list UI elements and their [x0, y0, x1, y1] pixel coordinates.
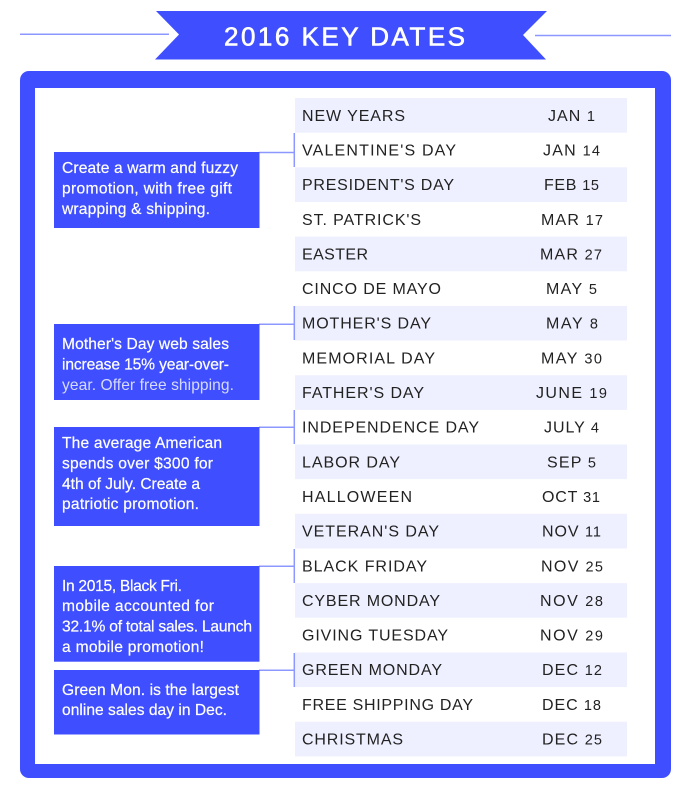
row: Christmas: CHRISTMAS	[302, 732, 403, 748]
callout: Green Monday: Green Mon. is the largest	[62, 682, 240, 699]
row: Valentine's Day: JAN 14	[543, 142, 600, 160]
row: Green Monday	[295, 652, 627, 687]
callout: Black Friday: In 2015, Black Fri.	[62, 578, 182, 595]
callout: Black Friday: 32.1% of total sales. Launch	[62, 618, 252, 635]
row: Labor Day: SEP 5	[547, 454, 596, 471]
row: Father's Day: FATHER'S DAY	[302, 385, 424, 402]
row: Free Shipping Day	[302, 697, 601, 714]
row: Cyber Monday: CYBER MONDAY	[302, 593, 440, 610]
row: St. Patrick's: ST. PATRICK'S	[302, 212, 421, 229]
row: Independence Day: INDEPENDENCE DAY	[302, 420, 479, 437]
row: Labor Day	[295, 444, 627, 479]
row: Cyber Monday	[295, 583, 627, 618]
callout: Mother's Day	[54, 306, 294, 400]
callout: Independence Day: The average American	[62, 435, 222, 452]
row: Easter: EASTER	[302, 246, 368, 263]
row: Black Friday	[302, 558, 603, 575]
row: Father's Day: JUNE 19	[536, 385, 607, 402]
row: New Years: JAN 1	[548, 108, 595, 125]
row: New Years: NEW YEARS	[302, 108, 405, 125]
row: Father's Day	[295, 375, 627, 410]
callout: Black Friday: mobile accounted for	[62, 598, 214, 615]
row: Green Monday: DEC 12	[542, 662, 602, 679]
row: Giving Tuesday: NOV 29	[540, 628, 603, 645]
row: Free Shipping Day: FREE SHIPPING DAY	[302, 697, 473, 714]
row: Black Friday: BLACK FRIDAY	[302, 558, 427, 575]
row: President's Day	[295, 167, 627, 202]
date table	[295, 98, 627, 756]
row: New Years	[295, 98, 627, 133]
callout: Independence Day	[54, 410, 294, 526]
row: Free Shipping Day: DEC 18	[542, 697, 601, 714]
callout: Independence Day: 4th of July. Create a	[62, 476, 200, 493]
header banner	[20, 11, 671, 60]
row: Mother's Day	[295, 306, 627, 341]
row: Valentine's Day: VALENTINE'S DAY	[302, 142, 456, 160]
callout: Independence Day: spends over $300 for	[62, 455, 213, 472]
row: Valentine's Day	[302, 142, 600, 160]
callout: Valentine's Day: Create a warm and fuzzy	[62, 160, 238, 177]
row: Labor Day: LABOR DAY	[302, 454, 400, 471]
row: Memorial Day: MAY 30	[541, 350, 602, 367]
row: Mother's Day: MOTHER'S DAY	[302, 316, 431, 333]
row: Memorial Day: MEMORIAL DAY	[302, 350, 435, 367]
callout: Valentine's Day	[54, 133, 294, 228]
row: Black Friday: NOV 25	[541, 558, 603, 575]
row: Memorial Day	[302, 350, 602, 367]
row: Cyber Monday: NOV 28	[540, 593, 603, 610]
row: Easter	[295, 237, 627, 271]
callout: Mother's Day: increase 15% year-over-	[62, 356, 229, 374]
row: President's Day: PRESIDENT'S DAY	[302, 177, 454, 194]
row: Christmas: DEC 25	[542, 732, 602, 748]
row: Cinco de Mayo	[302, 281, 597, 298]
row: St. Patrick's: MAR 17	[541, 212, 603, 229]
row: Veteran's Day: VETERAN'S DAY	[302, 524, 439, 541]
callout: Mother's Day: year. Offer free shipping.	[62, 377, 234, 394]
row: Cinco de Mayo: CINCO DE MAYO	[302, 281, 441, 298]
header banner: 2016 KEY DATES	[224, 22, 465, 52]
row: Green Monday: GREEN MONDAY	[302, 662, 442, 679]
callout: Independence Day: patriotic promotion.	[62, 496, 199, 513]
callout: Green Monday: online sales day in Dec.	[62, 702, 227, 719]
callout: Black Friday	[54, 549, 294, 662]
callout: Valentine's Day: promotion, with free gift	[62, 180, 233, 197]
row: President's Day: FEB 15	[544, 177, 599, 194]
callout: Mother's Day: Mother's Day web sales	[62, 336, 229, 353]
row: St. Patrick's	[302, 212, 603, 229]
row: Halloween	[302, 489, 600, 506]
row: Easter: MAR 27	[540, 246, 602, 263]
callout: Green Monday	[54, 653, 294, 734]
row: Halloween: HALLOWEEN	[302, 489, 412, 506]
row: Giving Tuesday	[302, 628, 603, 645]
row: Independence Day: JULY 4	[544, 420, 599, 437]
row: Cinco de Mayo: MAY 5	[546, 281, 597, 298]
callout: Black Friday: a mobile promotion!	[62, 639, 204, 656]
callout: Valentine's Day: wrapping & shipping.	[61, 201, 210, 218]
row: Mother's Day: MAY 8	[546, 316, 598, 333]
row: Independence Day	[302, 420, 599, 437]
row: Veteran's Day: NOV 11	[542, 524, 601, 541]
row: Halloween: OCT 31	[542, 489, 600, 506]
row: Christmas	[295, 722, 627, 756]
row: Giving Tuesday: GIVING TUESDAY	[302, 628, 448, 645]
row: Veteran's Day	[295, 514, 627, 548]
